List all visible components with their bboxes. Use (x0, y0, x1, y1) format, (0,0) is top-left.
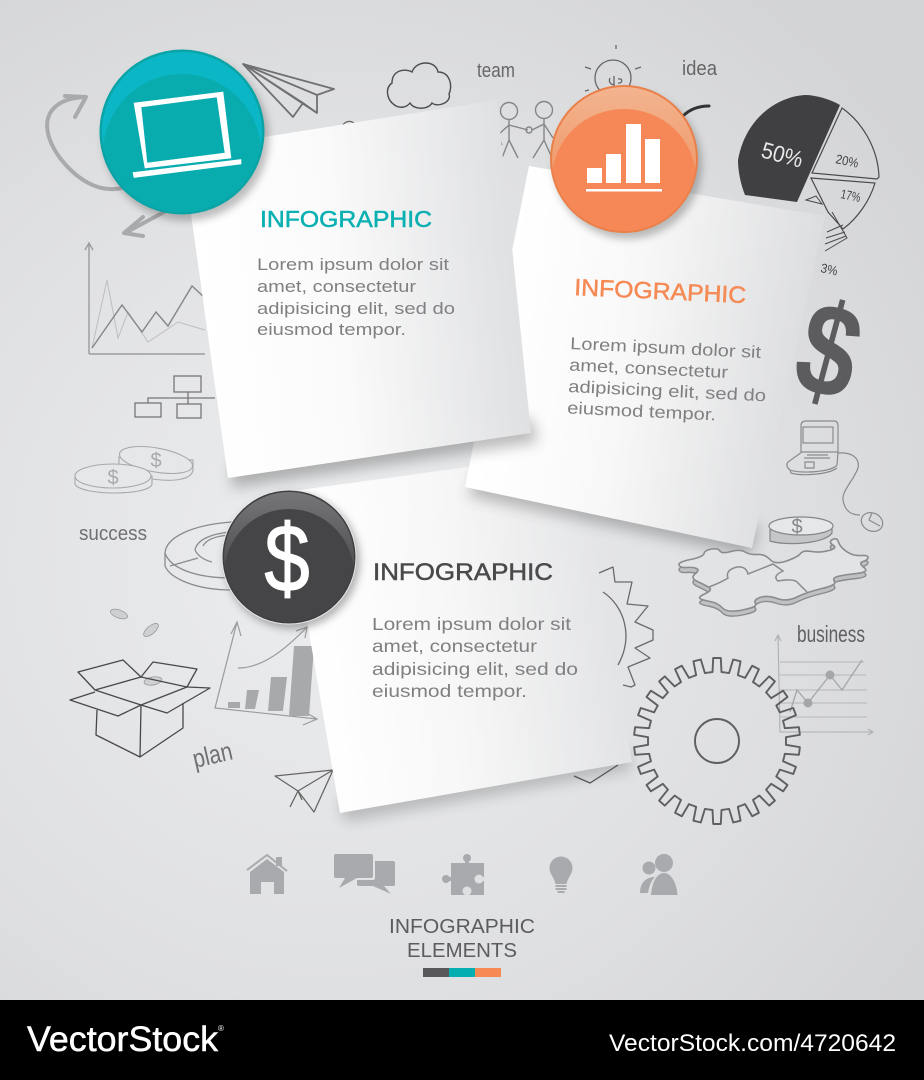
sketch: coin on puzzle (769, 516, 833, 544)
icon: light bulb (550, 856, 572, 893)
sketch: speech bubble fragment (574, 765, 618, 783)
watermark bar (0, 1000, 924, 1080)
sketch: small coins (109, 607, 163, 687)
badge: orange chart (550, 85, 702, 249)
sketch: coin stack (75, 442, 195, 493)
image url: VectorStock.com/4720642 (609, 1030, 896, 1057)
icon: people (640, 854, 678, 895)
sketch: business chart (775, 635, 873, 735)
body copy paper 2: eiusmod tempor. (567, 398, 717, 424)
badge: dark dollar (222, 490, 360, 641)
body copy paper 1: adipisicing elit, sed do (257, 299, 455, 318)
sketch: bar chart rising (215, 622, 317, 725)
sketch: donut chart (165, 522, 232, 590)
sketch: line chart left (85, 243, 205, 354)
sketch: coin stack: $ (150, 450, 162, 472)
body copy paper 3: adipisicing elit, sed do (372, 659, 578, 679)
panel: paper 1 (182, 100, 531, 478)
body copy paper 1: Lorem ipsum dolor sit (257, 255, 449, 274)
body copy paper 1: eiusmod tempor. (257, 320, 406, 339)
footer title (389, 915, 535, 962)
pie label 17%: 17% (839, 186, 862, 205)
pie label 50%: 50% (759, 137, 806, 173)
sketch: small arc (342, 121, 356, 126)
footer title: INFOGRAPHIC (389, 915, 535, 938)
label: team: team (477, 60, 515, 82)
puzzle top face (679, 539, 868, 611)
text block: paper 1 (257, 206, 455, 339)
body copy paper 1: amet, consectetur (257, 277, 416, 296)
label: plan: plan (190, 736, 235, 774)
shadow: paper 1 (232, 418, 538, 488)
body copy paper 3: Lorem ipsum dolor sit (372, 614, 571, 634)
shadow: paper 3 (338, 750, 630, 822)
heading: dark infographic: INFOGRAPHIC (373, 559, 553, 586)
label: idea: idea (682, 58, 718, 80)
text block: paper 2 (567, 274, 768, 427)
label: success: success (79, 523, 147, 545)
body copy paper 3: eiusmod tempor. (372, 681, 527, 701)
heading: orange infographic: INFOGRAPHIC (574, 274, 747, 308)
icon: sketched dollar: $ (781, 273, 876, 430)
icon: dollar sign: $ (264, 504, 310, 611)
panel: paper 3 (285, 452, 632, 813)
pie slice 20% (812, 108, 879, 179)
footer title: ELEMENTS (407, 939, 517, 962)
body copy paper 2: adipisicing elit, sed do (568, 377, 766, 405)
sketch: flow chart (135, 376, 215, 418)
sketch: coin on puzzle: $ (791, 516, 803, 538)
sketch: coin stack: $ (107, 467, 119, 489)
text block: paper 3 (372, 559, 578, 701)
colour bar (423, 968, 501, 977)
icon: laptop (133, 92, 241, 178)
puzzle seams (709, 564, 807, 592)
label: business: business (797, 621, 865, 647)
sketch: curved arrows (47, 96, 164, 236)
body copy paper 3 (372, 614, 578, 701)
sketch: paper plane top (243, 64, 334, 117)
sketch: mini laptop and mouse (787, 421, 886, 535)
sketch: puzzle pieces (679, 539, 868, 616)
sketch: paper plane bottom (275, 770, 333, 812)
shadow: paper 2 (468, 466, 760, 556)
sketch: cloud (387, 63, 451, 108)
pie slice 17% (811, 178, 875, 229)
pie chart (738, 95, 879, 279)
pie label 3%: 3% (819, 260, 840, 279)
pie slice 50% (738, 95, 840, 202)
badge: teal laptop (100, 50, 269, 232)
pie slice hatched (806, 196, 847, 251)
icon: puzzle piece (442, 854, 484, 896)
icon row (247, 854, 678, 896)
pie label 20%: 20% (834, 151, 860, 171)
heading: teal infographic: INFOGRAPHIC (260, 206, 432, 232)
body copy paper 2: Lorem ipsum dolor sit (570, 334, 762, 362)
icon: bar chart (586, 124, 662, 192)
sketch: light bulb (585, 45, 641, 96)
body copy paper 2: amet, consectetur (569, 355, 729, 382)
sketch: open box (70, 660, 210, 757)
sketch: dark curve (683, 106, 709, 116)
icon: speech bubbles (334, 854, 395, 894)
sketch: big gear (634, 658, 800, 824)
sketch: partial gear (599, 567, 653, 687)
body copy paper 1 (257, 255, 455, 339)
sketch: team figures (498, 102, 553, 158)
icon: house (247, 855, 287, 894)
body copy paper 3: amet, consectetur (372, 636, 537, 656)
panel: paper 2 (465, 166, 825, 548)
puzzle side thickness (679, 544, 868, 616)
body copy paper 2 (567, 334, 768, 427)
registered mark: ® (218, 1024, 224, 1033)
brand logo text: VectorStock (27, 1020, 219, 1059)
